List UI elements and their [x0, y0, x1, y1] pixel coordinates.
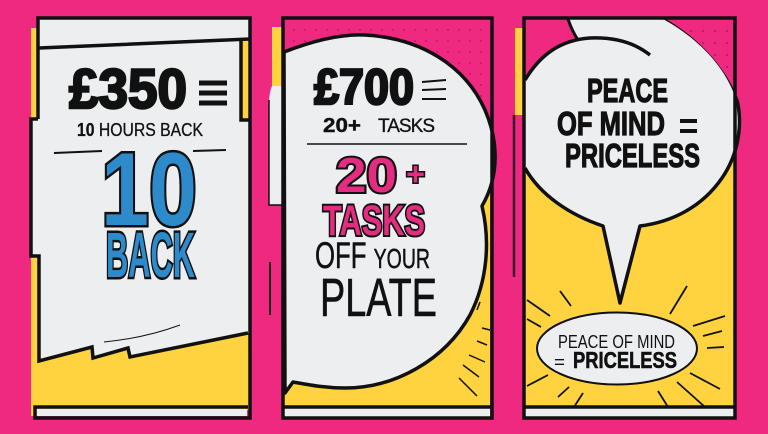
divider left: [54, 150, 226, 153]
callout oval: [537, 312, 697, 384]
text: plate: PLATE: [320, 268, 437, 328]
heading: £350: £350: [69, 57, 187, 120]
panel 1: 10 hours back: BACK: [106, 219, 195, 291]
panel 2: 20+ tasks: [269, 18, 495, 418]
big number 10: 10: [101, 132, 197, 248]
sunburst rays: [459, 302, 490, 396]
big number 20: 20: [336, 149, 397, 203]
panel 3: peace of mind: [514, 18, 740, 418]
heading: £700: £700: [314, 59, 414, 115]
subheading: 10 hours back: 10 HOURS BACK: [77, 120, 203, 140]
callout text: peace of mind: PEACE OF MIND: [558, 331, 675, 352]
subheading: tasks: TASKS: [378, 116, 435, 137]
callout text: priceless: PRICELESS: [573, 347, 677, 373]
icon: equals bars: [199, 83, 227, 103]
pen stroke: [104, 325, 180, 342]
heading line: priceless: PRICELESS: [565, 137, 700, 174]
speech bubble back: [568, 19, 700, 80]
speech bubble main: [525, 19, 740, 303]
sunburst rays: [527, 286, 725, 407]
heading equals sign: [680, 121, 697, 131]
heading line: of mind: OF MIND: [557, 105, 665, 142]
icon: equals bars: [422, 80, 446, 99]
subheading: 20+: 20+: [323, 115, 361, 137]
text: off your: OFF YOUR: [315, 235, 430, 276]
divider: [307, 143, 467, 145]
heading line: peace: PEACE: [587, 72, 668, 109]
callout equals: =: [554, 352, 565, 372]
panel 1: 10 hours back: [31, 18, 250, 418]
big plus: +: [406, 156, 425, 192]
big word tasks: TASKS: [323, 197, 425, 245]
speech bubble: [284, 35, 495, 393]
